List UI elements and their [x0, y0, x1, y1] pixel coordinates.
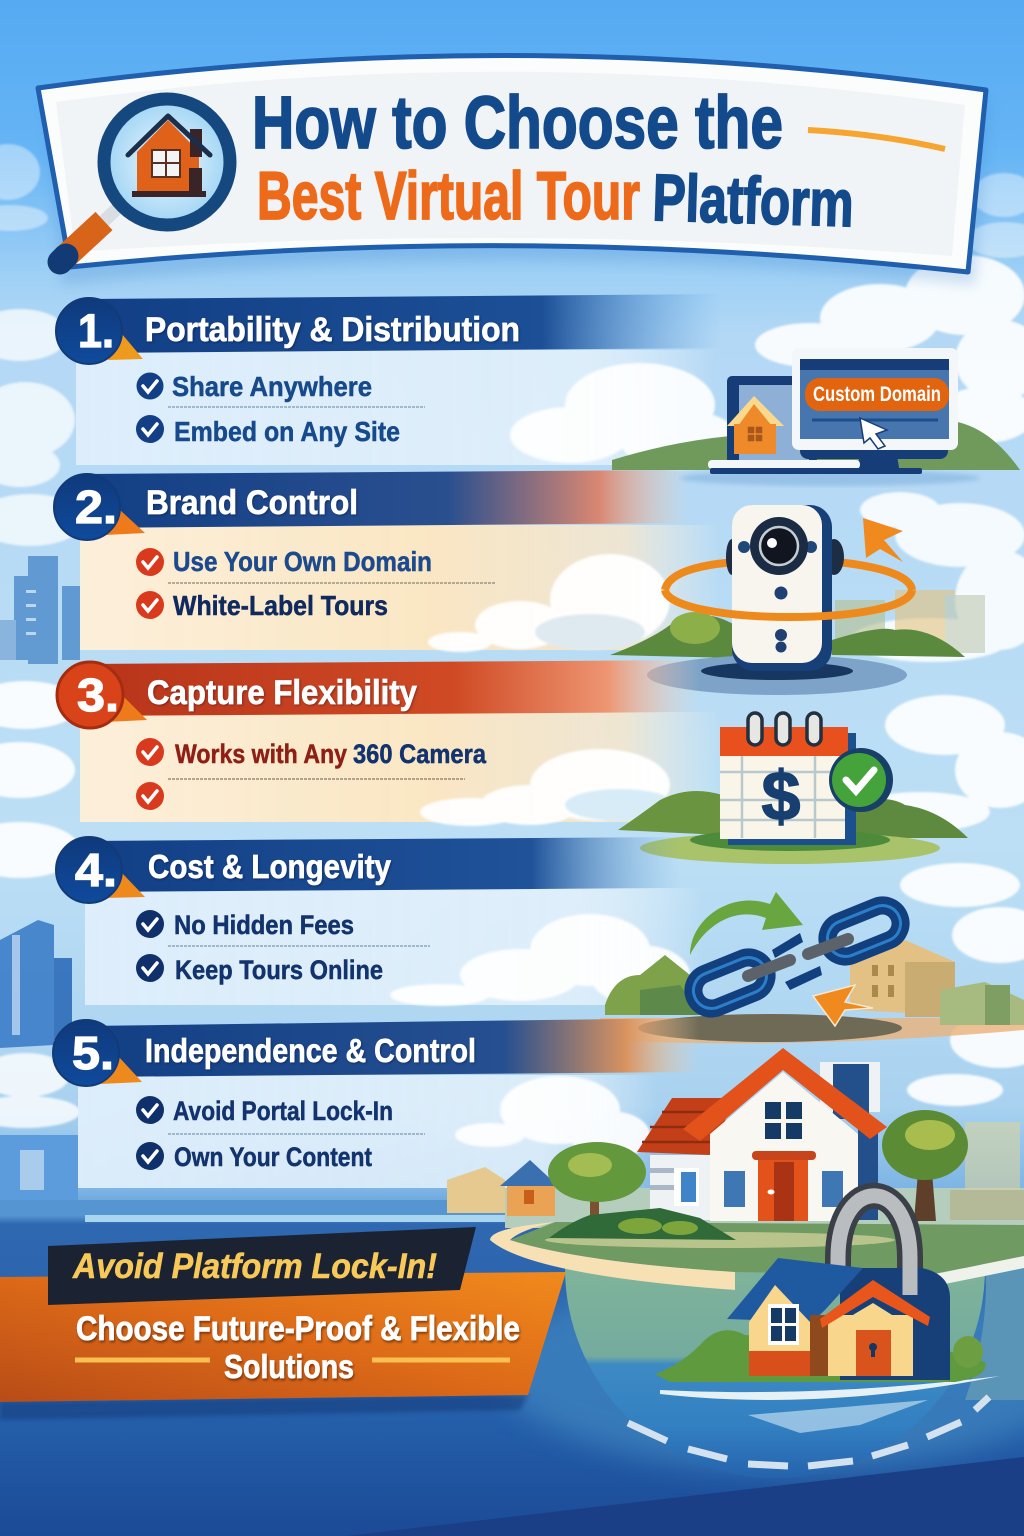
water reflection — [748, 1400, 928, 1433]
chimney and side wall — [820, 1062, 880, 1220]
heading 2: Brand Control — [146, 484, 358, 522]
lower windows — [724, 1171, 843, 1207]
heading 3: Capture Flexibility — [147, 674, 417, 712]
ring back — [665, 560, 912, 590]
orange banner — [0, 1272, 566, 1402]
building group upper — [0, 556, 80, 664]
main wall — [710, 1072, 858, 1221]
right link — [822, 900, 906, 962]
lawn light band — [545, 1232, 895, 1248]
soft water glow — [500, 1270, 1024, 1470]
green building — [940, 982, 1024, 1025]
buttons — [774, 586, 788, 652]
heading 4: Cost & Longevity — [148, 848, 392, 885]
check item: avoid lock-in: Avoid Portal Lock-In — [173, 1096, 393, 1126]
monitor stand — [856, 455, 900, 474]
lens — [738, 517, 817, 575]
background city left — [0, 556, 560, 1216]
shackle — [838, 1196, 910, 1295]
dollar sign: $ — [762, 757, 800, 835]
ground ellipses — [647, 655, 907, 695]
sand right — [925, 1256, 1024, 1287]
number badge 3 — [57, 662, 147, 728]
ribbon 2 — [85, 470, 690, 528]
ribbon 5 — [85, 1018, 700, 1077]
dark diagonal foreground — [346, 1457, 1024, 1536]
panel 3 — [80, 712, 720, 822]
sand path — [490, 1222, 735, 1290]
magnifier lens — [104, 99, 230, 225]
magnifier handle — [60, 204, 122, 262]
bushes — [605, 955, 700, 1015]
roof — [683, 1048, 887, 1141]
laptop house — [727, 396, 784, 454]
number badge 5: 5. — [72, 1027, 114, 1079]
check item: embed: Embed on Any Site — [174, 416, 400, 447]
black tag — [48, 1227, 476, 1305]
title accent stroke — [808, 130, 945, 149]
ribbon 4 — [85, 837, 680, 892]
number badge 4: 4. — [75, 844, 117, 896]
title line one: How to Choose the — [252, 81, 783, 164]
number badge 5 — [53, 1020, 142, 1086]
panel 5 — [78, 1075, 658, 1188]
check item: white-label: White-Label Tours — [173, 590, 388, 621]
check item: empty — [136, 782, 164, 810]
number badge 1: 1. — [78, 304, 114, 357]
cursor — [860, 418, 887, 449]
heading 1: Portability & Distribution — [145, 311, 520, 349]
padlock with houses — [655, 1196, 986, 1382]
monitor back — [800, 440, 948, 459]
main house — [549, 1048, 887, 1240]
tan building — [850, 940, 955, 1017]
building group lower — [0, 1135, 560, 1216]
right cottage — [820, 1280, 930, 1376]
title line two navy: Platform — [652, 160, 855, 240]
check item: any camera: Works with Any — [175, 739, 347, 769]
right bush — [953, 1336, 983, 1368]
ear bumps — [726, 539, 738, 575]
distant small houses — [447, 1160, 558, 1216]
number badge 2: 2. — [75, 481, 117, 533]
icon: laptop and custom domain monitor — [612, 348, 1020, 486]
distant tower — [950, 1122, 1024, 1220]
section 4 cost and longevity — [56, 837, 705, 1006]
callout line two: Solutions — [224, 1348, 354, 1385]
island — [655, 1330, 986, 1382]
teal side water — [965, 1255, 1024, 1400]
check item: own domain: Use Your Own Domain — [173, 546, 432, 577]
lens house — [128, 116, 210, 197]
check item: keep tours online: Keep Tours Online — [175, 955, 383, 985]
custom domain button: Custom Domain — [813, 383, 941, 406]
callout accent lines — [75, 1358, 510, 1362]
lock body — [840, 1268, 950, 1380]
section 5 independence — [53, 1018, 700, 1188]
check item: no hidden fees: No Hidden Fees — [174, 910, 354, 940]
panel 1 — [76, 350, 716, 465]
tree left — [548, 1142, 646, 1220]
panel 5 clouds — [455, 1076, 650, 1159]
check badge — [829, 748, 893, 812]
left link — [688, 952, 772, 1014]
camera body — [732, 505, 832, 671]
number badge 3: 3. — [77, 669, 119, 721]
ribbon 1 — [85, 294, 720, 353]
hills — [618, 791, 722, 835]
orange arrow — [813, 985, 873, 1026]
foreground bush — [549, 1208, 736, 1240]
number badge 4 — [56, 837, 145, 903]
check item: own content: Own Your Content — [174, 1142, 372, 1172]
tan cottage — [447, 1167, 505, 1213]
ring front — [665, 590, 912, 617]
upper window — [765, 1102, 802, 1139]
wing — [637, 1098, 735, 1220]
title line two orange: Best Virtual Tour — [257, 158, 640, 234]
magnifier icon — [60, 99, 230, 262]
hills — [610, 615, 735, 658]
calendar rings — [748, 713, 821, 745]
callout line one: Choose Future-Proof & Flexible — [76, 1310, 520, 1348]
panel 1 clouds — [510, 363, 740, 470]
panel 4 clouds — [390, 914, 690, 1006]
hill — [612, 420, 1020, 470]
building group middle — [0, 920, 72, 1048]
custom domain button — [805, 378, 949, 411]
background clouds — [0, 144, 1024, 1128]
section 2 brand control — [54, 470, 720, 652]
laptop base — [708, 460, 922, 474]
lawn — [510, 1222, 1024, 1275]
panel 2 — [80, 525, 720, 650]
break dashes — [772, 933, 822, 990]
road dashes — [628, 1397, 989, 1466]
ground — [640, 832, 940, 864]
calendar back — [728, 733, 856, 845]
base shadow — [680, 470, 980, 486]
shackle front stub — [902, 1262, 918, 1295]
ribbon 3 — [85, 660, 700, 716]
number badge 2 — [54, 474, 145, 540]
landscape ground — [85, 1188, 1024, 1536]
section 3 capture flexibility — [57, 660, 720, 826]
horizon highlight — [85, 1215, 575, 1222]
far strip — [505, 1188, 1024, 1228]
callout headline: Avoid Platform Lock-In! — [72, 1247, 437, 1286]
tree right — [882, 1110, 1024, 1221]
distant buildings — [835, 590, 985, 653]
banner shadow — [45, 71, 990, 285]
monitor — [792, 348, 958, 450]
ground band — [600, 1018, 1024, 1043]
callout: warning banner and orange banner — [0, 1227, 566, 1420]
number badge 1 — [56, 298, 143, 364]
calendar header — [720, 727, 848, 756]
blue roof — [727, 1258, 863, 1322]
orange cottage — [500, 1160, 558, 1216]
icon: calendar with dollar — [618, 713, 968, 864]
banner card — [38, 55, 986, 272]
green arrow — [690, 892, 803, 955]
calendar page — [720, 752, 845, 839]
left cottage — [749, 1285, 830, 1376]
rotation arrow — [863, 518, 903, 562]
metal bars — [748, 939, 848, 976]
check item: any camera — [136, 738, 487, 769]
heading 5: Independence & Control — [145, 1032, 476, 1069]
panel 4 — [85, 888, 705, 1005]
icon: broken chain — [600, 892, 1024, 1043]
panel 2 clouds — [428, 554, 670, 652]
water highlight — [660, 1376, 1000, 1400]
water dome — [565, 1268, 985, 1478]
check item: share anywhere: Share Anywhere — [172, 371, 372, 402]
door — [752, 1151, 816, 1221]
banner shadow — [0, 1395, 528, 1420]
icon: 360 camera — [610, 505, 985, 695]
section 1 portability — [56, 294, 740, 470]
check item: any camera: 360 Camera — [353, 739, 487, 769]
laptop screen — [727, 376, 817, 464]
panel 3 clouds — [420, 749, 675, 826]
banner inner shade — [56, 72, 965, 256]
title banner — [38, 55, 990, 285]
